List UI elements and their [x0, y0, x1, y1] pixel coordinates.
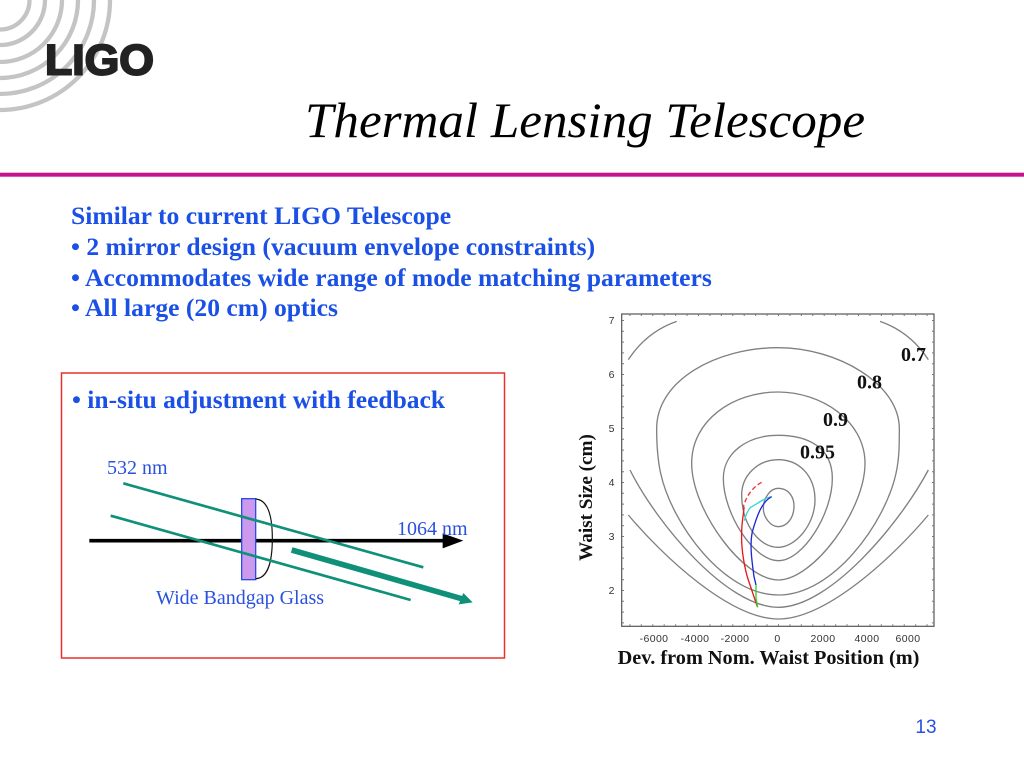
x axis ticks: 2000 [811, 633, 835, 645]
page number: 13 [915, 717, 937, 738]
panel heading: • in-situ adjustment with feedback [72, 385, 446, 414]
y axis ticks: 3 [609, 531, 615, 543]
contour labels: 0.8 [857, 372, 882, 394]
x axis ticks: 6000 [896, 633, 920, 645]
532 nm beam lower [111, 516, 411, 600]
x axis ticks: -2000 [721, 633, 749, 645]
label: 532 nm: 532 nm [107, 457, 168, 479]
icon: logo arcs [0, 0, 110, 110]
wide bandgap glass [242, 499, 256, 580]
y axis ticks: 6 [609, 369, 615, 381]
text block: telescope summary: • All large (20 cm) optics [71, 293, 338, 322]
arrow: 1064 nm beam [89, 533, 463, 548]
532 nm beam upper [123, 483, 423, 567]
x axis ticks: -6000 [640, 633, 668, 645]
contour labels: 0.95 [800, 442, 835, 464]
chart: contour plot [576, 314, 934, 669]
logo: LIGO [0, 0, 154, 110]
x axis ticks: 4000 [855, 633, 879, 645]
text block: telescope summary: Similar to current LIGO Telescope [71, 201, 451, 230]
arrow: output beam [292, 550, 473, 604]
y axis ticks: 5 [609, 423, 615, 435]
x axis ticks: -4000 [681, 633, 709, 645]
title: Thermal Lensing Telescope [305, 92, 865, 148]
x axis ticks: 0 [774, 633, 781, 645]
plot frame [622, 314, 934, 626]
y axis title: Waist Size (cm) [576, 434, 597, 561]
y axis ticks: 4 [609, 477, 615, 489]
lens curve [256, 499, 272, 579]
x axis ticks [640, 633, 920, 645]
panel border [62, 373, 504, 658]
x axis title: Dev. from Nom. Waist Position (m) [618, 647, 919, 669]
text block: telescope summary [71, 201, 712, 322]
frame tick marks [623, 315, 934, 626]
y axis ticks: 7 [609, 315, 615, 327]
label: 1064 nm: 1064 nm [397, 518, 468, 540]
panel: in-situ adjustment [62, 373, 504, 658]
text block: telescope summary: • 2 mirror design (vacuum envelope constraints) [71, 232, 595, 261]
contour labels [800, 344, 926, 464]
title rule [0, 173, 1024, 177]
contour lines [628, 321, 928, 619]
y axis ticks [609, 315, 615, 597]
contour labels: 0.9 [823, 409, 848, 431]
label: wide bandgap glass: Wide Bandgap Glass [156, 587, 324, 609]
y axis ticks: 2 [609, 585, 615, 597]
mode matching trajectories [742, 482, 772, 607]
logo wordmark: LIGO [45, 36, 154, 84]
optical diagram [89, 483, 473, 604]
text block: telescope summary: • Accommodates wide range of mode matching parameters [71, 263, 712, 292]
contour labels: 0.7 [901, 344, 926, 366]
